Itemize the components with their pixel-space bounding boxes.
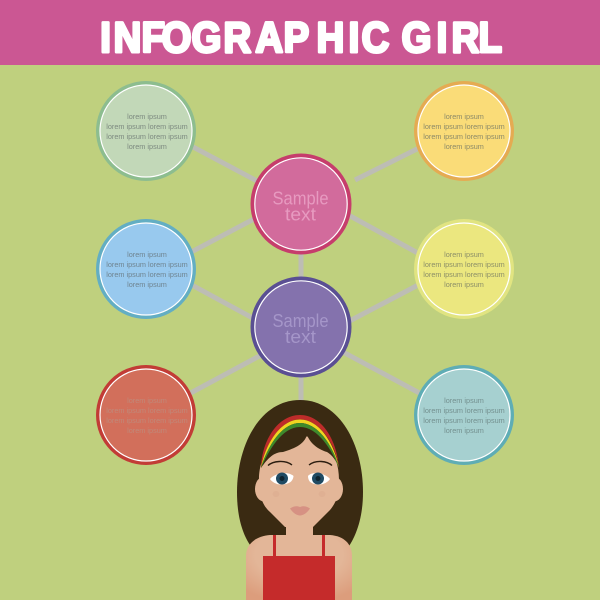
- cheeks: [272, 491, 326, 497]
- circle: purple sample text: text: [285, 327, 316, 347]
- hair: [237, 400, 363, 549]
- circle: teal text bubble: [414, 365, 514, 465]
- neck: [286, 515, 313, 540]
- circle: blue text bubble: lorem ipsum lorem ipsum: [106, 260, 188, 269]
- circle: teal text bubble: lorem ipsum: [444, 396, 484, 405]
- circle: red text bubble: [96, 365, 196, 465]
- fringe: [261, 425, 339, 468]
- ears: [255, 476, 343, 502]
- circle: blue text bubble: lorem ipsum: [127, 250, 167, 259]
- lips: [290, 506, 310, 516]
- dress: [263, 535, 335, 600]
- circle: purple sample text: Sample: [272, 311, 328, 331]
- circle: yellow text bubble: lorem ipsum: [444, 250, 484, 259]
- circle: orange text bubble: [414, 81, 514, 181]
- circle: blue text bubble: [96, 219, 196, 319]
- title: INFOGRAPHIC GIRL: [100, 13, 502, 61]
- circle: orange text bubble: lorem ipsum lorem ipsum: [423, 122, 505, 131]
- circle: teal text bubble: lorem ipsum lorem ipsum: [423, 406, 505, 415]
- connector lines: [185, 143, 425, 405]
- body: [246, 535, 352, 600]
- circle: green text bubble: [96, 81, 196, 181]
- circle: pink sample text: [250, 154, 352, 254]
- circle: green text bubble: lorem ipsum lorem ipsum: [106, 122, 188, 131]
- circle: pink sample text: Sample: [272, 188, 328, 208]
- eyes: [270, 472, 330, 484]
- face: [259, 436, 339, 527]
- circle: pink sample text: text: [285, 205, 316, 225]
- circle: green text bubble: lorem ipsum lorem ipsum: [106, 132, 188, 141]
- circle: yellow text bubble: lorem ipsum lorem ipsum: [423, 260, 505, 269]
- circle: blue text bubble: lorem ipsum lorem ipsum: [106, 270, 188, 279]
- circle: yellow text bubble: lorem ipsum: [444, 280, 484, 289]
- circle: orange text bubble: lorem ipsum: [444, 142, 484, 151]
- circle: red text bubble: lorem ipsum: [127, 426, 167, 435]
- circle: blue text bubble: lorem ipsum: [127, 280, 167, 289]
- circle: red text bubble: lorem ipsum lorem ipsum: [106, 416, 188, 425]
- circle: orange text bubble: lorem ipsum lorem ipsum: [423, 132, 505, 141]
- circle: yellow text bubble: [414, 219, 514, 319]
- eyebrows: [268, 461, 332, 466]
- title banner: [0, 0, 600, 65]
- headband: [261, 415, 339, 468]
- circle: red text bubble: lorem ipsum: [127, 396, 167, 405]
- circle: orange text bubble: lorem ipsum: [444, 112, 484, 121]
- circle: yellow text bubble: lorem ipsum lorem ipsum: [423, 270, 505, 279]
- circle: green text bubble: lorem ipsum: [127, 112, 167, 121]
- circle: green text bubble: lorem ipsum: [127, 142, 167, 151]
- circle: red text bubble: lorem ipsum lorem ipsum: [106, 406, 188, 415]
- girl illustration: [237, 400, 363, 600]
- circle: teal text bubble: lorem ipsum: [444, 426, 484, 435]
- circle: purple sample text: [250, 276, 352, 378]
- circle: teal text bubble: lorem ipsum lorem ipsum: [423, 416, 505, 425]
